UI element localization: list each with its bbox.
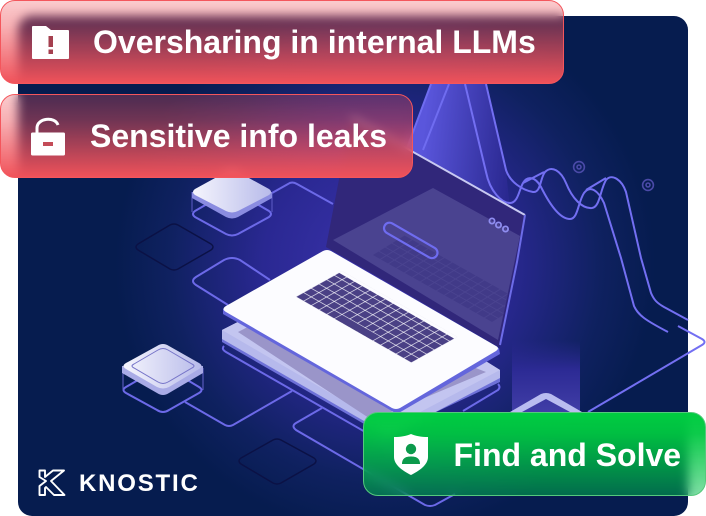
target dots: [574, 162, 653, 190]
heading: oversharing: Oversharing in internal LLMs: [93, 24, 536, 60]
icon: folder with exclamation: [32, 26, 69, 59]
panel: oversharing callout: [0, 0, 564, 84]
panel: sensitive info callout: [0, 94, 413, 178]
panel: find and solve button: [363, 412, 706, 496]
laptop base: [223, 309, 500, 414]
icon: knostic k mark: [38, 470, 66, 496]
heading: sensitive info: Sensitive info leaks: [90, 118, 387, 154]
connector lines: [185, 182, 500, 506]
right outline diamond: [588, 326, 704, 412]
laptop screen: [326, 117, 525, 347]
brand name: KNOSTIC: [79, 470, 200, 497]
keyboard: [296, 271, 458, 363]
icon: shield with person: [394, 434, 428, 475]
window dots: [489, 218, 508, 232]
vertical light beam: [512, 340, 580, 415]
dark outline diamonds: [136, 224, 316, 484]
logo: knostic: [38, 470, 200, 497]
small node near button: [510, 393, 582, 412]
icon: open padlock: [31, 118, 65, 156]
heading: find and solve: Find and Solve: [454, 437, 681, 473]
reflected keyboard: [374, 236, 507, 322]
top node: [192, 170, 272, 236]
left node: [122, 344, 203, 412]
laptop: [222, 117, 525, 436]
laptop stand plate: [222, 270, 500, 436]
search pill: [382, 221, 439, 260]
mountain lines behind laptop: [405, 84, 688, 345]
